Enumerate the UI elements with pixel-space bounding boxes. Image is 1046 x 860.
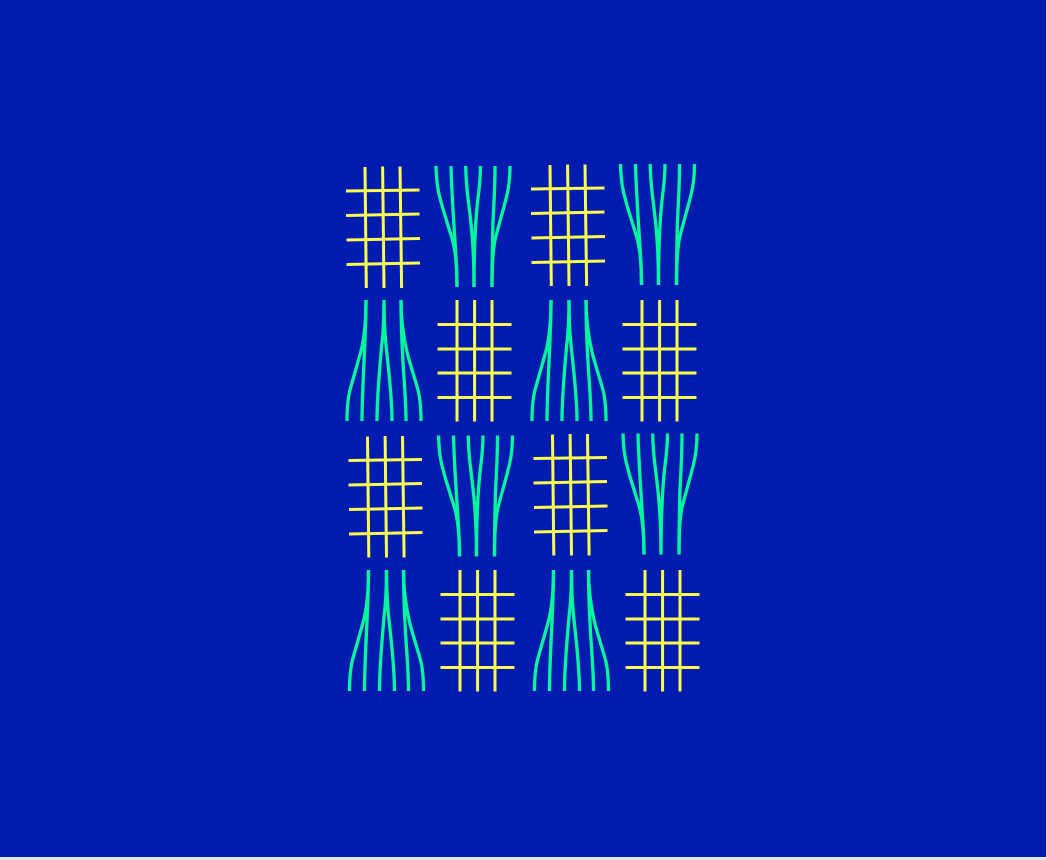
tile: flat grid r2c4	[622, 300, 696, 422]
tile: tilted grid r1c1	[346, 166, 420, 288]
tile: fan r1c2	[436, 166, 510, 287]
tile: fan r1c4	[620, 164, 694, 285]
tile: tilted grid r1c3	[531, 164, 605, 286]
tile: fan r3c4	[623, 434, 697, 554]
tile: flat grid r4c4	[626, 570, 700, 692]
tile: flat grid r2c2	[438, 300, 512, 422]
tile: fan r3c2	[438, 436, 512, 556]
row 4 tiles	[350, 570, 700, 692]
tile: tilted grid r3c3	[534, 434, 608, 556]
tile: fan r2c3	[532, 300, 606, 421]
row 2 tiles	[347, 300, 696, 422]
row 1 tiles	[346, 164, 694, 288]
tile: tilted grid r3c1	[348, 436, 422, 558]
tile: flat grid r4c2	[440, 570, 514, 692]
row 3 tiles	[348, 434, 697, 558]
tile: fan r2c1	[347, 300, 421, 421]
tile: fan r4c1	[350, 570, 424, 691]
tile: fan r4c3	[534, 570, 608, 691]
